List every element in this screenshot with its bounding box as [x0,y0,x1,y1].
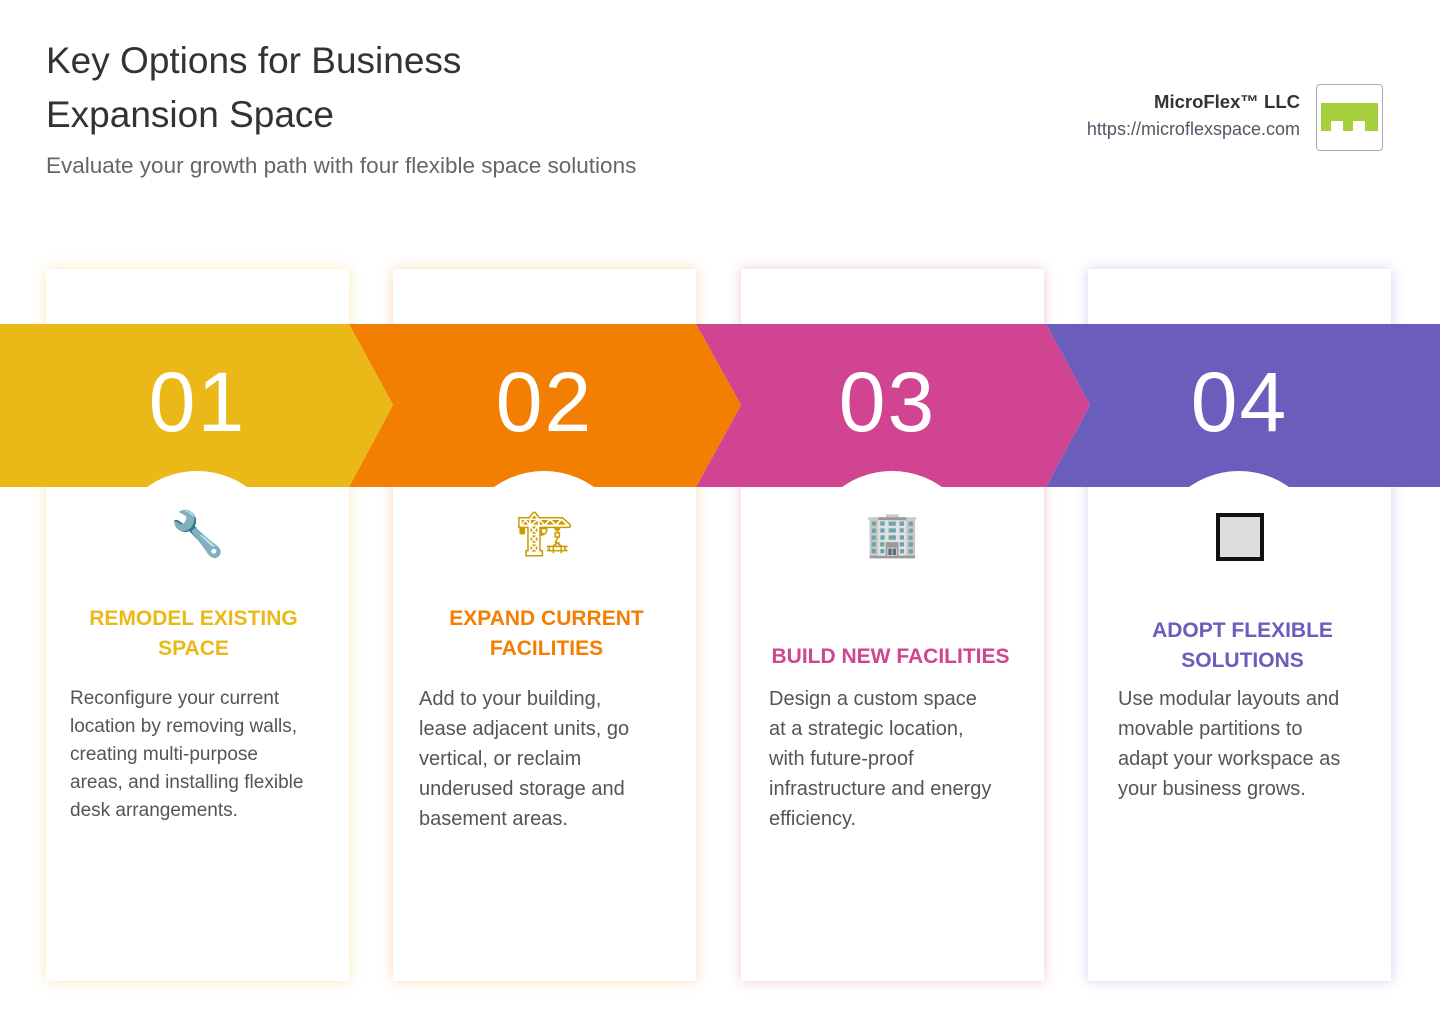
text 1: areas, and installing flexible [70,772,303,793]
text 1: location by removing walls, [70,716,297,737]
heading 4 [1152,619,1333,672]
heading 4: ADOPT FLEXIBLE [1152,619,1333,642]
title [46,40,461,135]
text 2: underused storage and [419,778,625,800]
text 2: vertical, or reclaim [419,748,581,770]
text 3: at a strategic location, [769,718,964,740]
text 4: Use modular layouts and [1118,688,1339,710]
text 4 [1118,688,1340,800]
icon: wrench: 🔧 [170,509,225,560]
text 1 [70,688,303,821]
brand text [1087,91,1300,139]
text 4: your business grows. [1118,778,1306,800]
brand block [1087,84,1383,151]
text 3: infrastructure and energy [769,778,991,800]
heading 4: SOLUTIONS [1181,649,1304,672]
text 1: creating multi-purpose [70,744,258,765]
text 2: lease adjacent units, go [419,718,629,740]
subtitle: Evaluate your growth path with four flexible space solutions [46,153,636,178]
brand text: https://microflexspace.com [1087,119,1300,139]
icon: building: 🏢 [865,509,920,560]
heading 3: BUILD NEW FACILITIES [772,645,1010,668]
heading 1: REMODEL EXISTING [89,607,298,630]
card 3 [741,269,1044,981]
card 1 [46,269,349,981]
text: 02 [496,355,593,449]
text 3: efficiency. [769,808,856,830]
heading 1 [89,607,298,660]
text 3: Design a custom space [769,688,977,710]
text 1: desk arrangements. [70,800,238,821]
title: Key Options for Business [46,40,461,81]
title: Expansion Space [46,94,334,135]
text: 03 [839,355,936,449]
text 3: with future-proof [769,748,914,770]
heading 2: EXPAND CURRENT [449,607,644,630]
icon circles [111,471,283,643]
text 2: Add to your building, [419,688,601,710]
text: 04 [1191,355,1288,449]
text 1: Reconfigure your current [70,688,279,709]
chevron banner [0,324,1440,487]
heading 2 [449,607,644,660]
brand text: MicroFlex™ LLC [1154,91,1300,112]
text 2: basement areas. [419,808,568,830]
text 4: adapt your workspace as [1118,748,1340,770]
text 3 [769,688,992,830]
heading 1: SPACE [158,637,229,660]
heading 2: FACILITIES [490,637,603,660]
logo [1316,84,1383,151]
icon: square [1216,513,1264,561]
text 4: movable partitions to [1118,718,1303,740]
text 2 [419,688,629,830]
card 4 [1088,269,1391,981]
numbers: 01 [149,355,246,449]
card 2 [393,269,696,981]
icon: crane: 🏗 [517,509,572,560]
